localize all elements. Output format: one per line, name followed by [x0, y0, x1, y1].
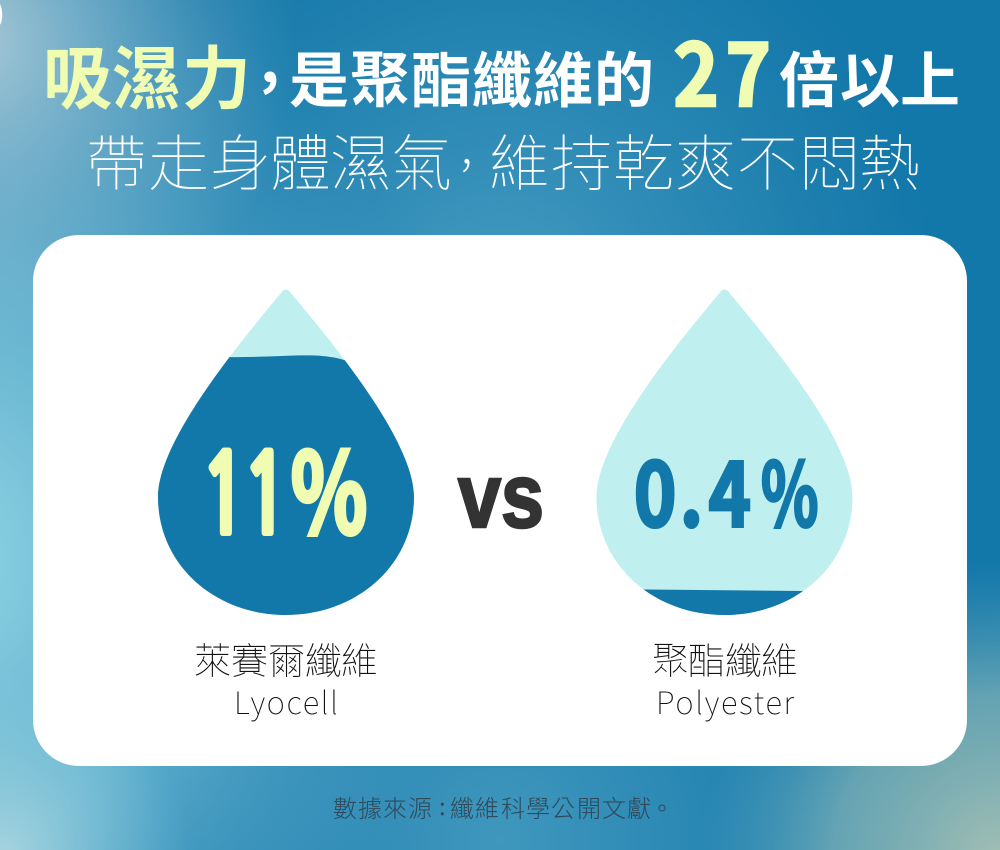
vs label: vs [458, 446, 544, 547]
label: polyester [652, 631, 798, 723]
label: polyester: 聚酯纖維 [652, 631, 798, 685]
title [43, 6, 960, 131]
label: lyocell: Lyocell [234, 678, 338, 723]
title highlight: 吸濕力: 吸濕力 [43, 23, 251, 123]
subtitle: 維持乾爽不悶熱 [489, 114, 920, 203]
title number: 27: 27 [673, 6, 771, 131]
value: 0.4% [634, 425, 819, 553]
label: polyester: Polyester [656, 678, 794, 723]
subtitle [86, 99, 920, 203]
icon: lyocell water drop 11% [150, 285, 420, 620]
source note: 纖維科學公開文獻。 [450, 789, 674, 824]
value: 11% [200, 406, 367, 565]
value: 0.4%: % [761, 425, 819, 552]
value: 11%: 11 [200, 441, 290, 550]
source note: 數據來源 [333, 789, 432, 824]
title text: 倍以上: 倍以上 [779, 33, 960, 120]
source note: : [439, 787, 446, 822]
value: 0.4%: 0.4 [634, 426, 751, 553]
subtitle: 帶走身體濕氣 [86, 114, 452, 203]
value: 11%: % [291, 406, 367, 565]
icon: polyester water drop 0.4% [588, 285, 858, 620]
label: lyocell: 萊賽爾纖維 [194, 631, 378, 685]
title comma: , [260, 13, 280, 100]
panel: comparison card [33, 235, 967, 766]
source note [333, 787, 674, 824]
title text: 是聚酯纖維的: 是聚酯纖維的 [289, 33, 654, 120]
label: lyocell [194, 631, 378, 723]
subtitle: , [460, 99, 473, 180]
